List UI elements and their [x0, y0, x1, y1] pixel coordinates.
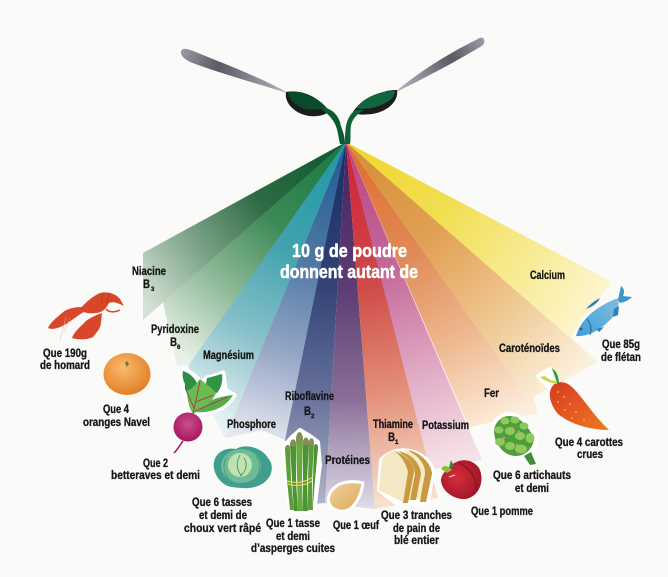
caption: pain: [381, 510, 452, 547]
caption: asperges: d’asperges cuites: [251, 543, 335, 555]
caption: carottes: Que 4 carottes: [555, 437, 623, 449]
caption: fletan: [601, 339, 641, 364]
icon: asparagus: [284, 430, 320, 512]
caption: choux: Que 6 tasses: [192, 497, 252, 509]
caption: pain: blé entier: [394, 535, 439, 547]
icon: green powder stream left: [322, 107, 345, 144]
ray: proteines: [325, 142, 375, 509]
label: thiamine B1: 1: [395, 440, 399, 446]
label: riboflavine B2: B: [304, 406, 311, 418]
label: fer: Fer: [484, 388, 499, 400]
icon: cabbage: [214, 446, 272, 488]
label: riboflavine B2: [285, 391, 334, 420]
caption: homard: [40, 348, 90, 372]
caption: homard: de homard: [40, 360, 90, 372]
label: pyridoxine B6: 6: [177, 345, 181, 351]
caption: pain: de pain de: [393, 523, 440, 535]
ray: pyridoxine: [163, 142, 346, 366]
label: thiamine B1: Thiamine: [373, 419, 413, 431]
label: magnesium: Magnésium: [203, 350, 254, 362]
ray: riboflavine: [285, 142, 346, 505]
icon: right spoon: [353, 38, 484, 115]
ray: potassium: [346, 142, 482, 470]
ray: thiamine: [346, 142, 438, 509]
ray: carotenoides: [346, 142, 598, 413]
caption: artichauts: et demi: [515, 483, 549, 495]
icon: egg: [328, 482, 363, 511]
label: potassium: Potassium: [422, 420, 469, 432]
chart: radiating nutrient rays: [143, 142, 612, 509]
icon: orange: [104, 353, 150, 395]
label: proteines: Protéines: [325, 455, 370, 467]
label: pyridoxine B6: Pyridoxine: [151, 324, 199, 336]
caption: choux: [184, 497, 261, 535]
label: pyridoxine B6: [151, 324, 199, 351]
caption: oranges: oranges Navel: [83, 417, 150, 429]
caption: asperges: [251, 518, 335, 555]
caption: choux: et demi de: [199, 510, 247, 522]
label: riboflavine B2: Riboflavine: [285, 391, 334, 403]
icon: apple: [441, 460, 481, 499]
label: thiamine B1: B: [388, 432, 395, 444]
caption: pomme: Que 1 pomme: [471, 506, 533, 518]
icon: fish: [576, 286, 632, 336]
ray: phosphore: [225, 142, 346, 440]
caption: choux: choux vert râpé: [184, 523, 261, 535]
caption: pain: Que 3 tranches: [381, 510, 452, 522]
caption: fletan: Que 85g: [602, 339, 640, 351]
ray: niacine: [143, 142, 346, 320]
heading: donnent autant de: [280, 262, 418, 282]
heading: 10 g de poudre: [292, 241, 407, 261]
label: niacine B3: Niacine: [132, 266, 166, 278]
label: niacine B3: B: [143, 279, 150, 291]
label: pyridoxine B6: B: [170, 337, 177, 349]
icon: lobster: [48, 292, 124, 340]
caption: fletan: de flétan: [601, 352, 641, 364]
caption: carottes: crues: [577, 449, 603, 461]
caption: oranges: Que 4: [103, 404, 129, 416]
label: thiamine B1: [373, 419, 413, 446]
caption: oeuf: Que 1 œuf: [333, 520, 379, 532]
label: phosphore: Phosphore: [227, 419, 276, 431]
caption: homard: Que 190g: [43, 348, 87, 360]
caption: artichauts: Que 6 artichauts: [493, 470, 571, 482]
ray: calcium: [346, 142, 612, 338]
icon: green powder stream right: [345, 110, 364, 144]
caption: betteraves: betteraves et demi: [111, 470, 200, 482]
icon: carrot: [538, 368, 609, 430]
caption: asperges: Que 1 tasse: [266, 518, 320, 530]
caption: betteraves: Que 2: [143, 458, 168, 470]
icon: artichoke: [492, 414, 536, 465]
label: niacine B3: 3: [151, 287, 155, 293]
icon: bread slices: [379, 450, 433, 503]
caption: carottes: [555, 437, 623, 461]
caption: oranges: [83, 404, 150, 429]
heading: [280, 241, 418, 282]
ray: magnesium: [188, 142, 346, 438]
label: niacine B3: [132, 266, 166, 293]
label: carotenoides: Caroténoïdes: [499, 343, 560, 355]
caption: asperges: et demi: [276, 531, 310, 543]
icon: beet: [174, 370, 234, 453]
icon: left spoon: [181, 49, 328, 116]
caption: artichauts: [493, 470, 571, 495]
label: calcium: Calcium: [530, 270, 565, 282]
label: riboflavine B2: 2: [311, 414, 315, 420]
caption: betteraves: [111, 458, 200, 482]
ray: fer: [346, 142, 538, 427]
